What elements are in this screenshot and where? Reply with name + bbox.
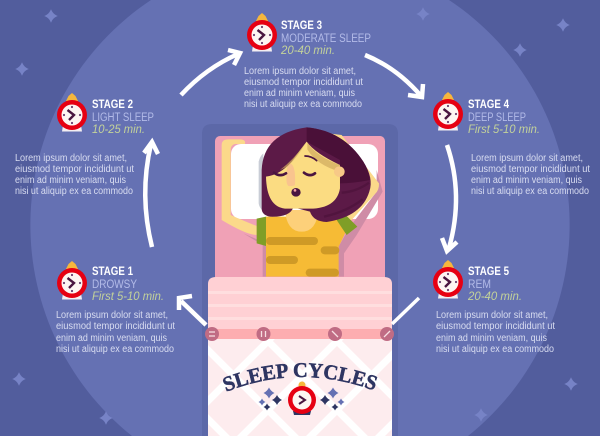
stage 5 text: nisi ut aliquip ex ea commodo bbox=[436, 344, 554, 355]
stage 2 heading: 10-25 min. bbox=[92, 124, 145, 136]
stage 5 bbox=[433, 260, 555, 355]
stage 4 bbox=[433, 92, 590, 197]
stage 4 text bbox=[471, 153, 590, 197]
icon: alarm clock bbox=[433, 260, 463, 298]
stage 5 heading bbox=[467, 266, 522, 303]
hair bbox=[262, 127, 371, 222]
stage 2 bbox=[15, 93, 154, 197]
stage 2 text bbox=[15, 153, 134, 197]
pillow bbox=[231, 144, 378, 219]
arrow: stage 2 to stage 3 bbox=[181, 50, 240, 95]
stage 4 text: eiusmod tempor incididunt ut bbox=[471, 164, 590, 175]
stage 3 text: nisi ut aliquip ex ea commodo bbox=[244, 99, 362, 110]
stage 2 text: eiusmod tempor incididunt ut bbox=[15, 164, 134, 175]
stage 3 heading: 20-40 min. bbox=[280, 45, 335, 57]
blanket band bbox=[208, 329, 392, 339]
line: blanket to stage 5 bbox=[392, 298, 419, 324]
arrow: stage 4 to stage 5 bbox=[442, 145, 457, 251]
stage 1 text: nisi ut aliquip ex ea commodo bbox=[56, 344, 174, 355]
eyes and mouth bbox=[274, 173, 286, 175]
stage 3 heading: MODERATE SLEEP bbox=[281, 33, 371, 45]
shirt bbox=[266, 217, 347, 277]
stage 5 text: enim ad minim veniam, quis bbox=[436, 333, 547, 344]
icon: alarm clock bbox=[247, 13, 277, 52]
stage 3 heading: STAGE 3 bbox=[281, 20, 322, 32]
stage 5 text: eiusmod tempor incididunt ut bbox=[436, 321, 555, 332]
icon: alarm clock bbox=[57, 261, 87, 300]
mattress bbox=[215, 136, 385, 286]
stage 1 text: eiusmod tempor incididunt ut bbox=[56, 321, 175, 332]
stage 5 heading: REM bbox=[468, 279, 491, 291]
arrow: stage 3 to stage 4 bbox=[365, 55, 423, 97]
panel: bed bbox=[202, 124, 398, 436]
stage 4 text: enim ad minim veniam, quis bbox=[471, 175, 582, 186]
stage 4 heading: STAGE 4 bbox=[468, 99, 510, 111]
stage 3 text: Lorem ipsum dolor sit amet, bbox=[244, 66, 356, 77]
stage 4 text: nisi ut aliquip ex ea commodo bbox=[471, 186, 589, 197]
stage 3 text: eiusmod tempor incididunt ut bbox=[244, 77, 363, 88]
arrow: blanket to stage 1 bbox=[179, 296, 206, 325]
stage 2 text: Lorem ipsum dolor sit amet, bbox=[15, 153, 127, 164]
stage 4 heading bbox=[468, 99, 540, 136]
stage 1 heading: STAGE 1 bbox=[92, 266, 134, 278]
stage 1 text bbox=[56, 310, 175, 355]
stage 5 text bbox=[436, 310, 555, 355]
icon: alarm clock bbox=[433, 92, 463, 130]
stage 2 heading: LIGHT SLEEP bbox=[92, 112, 154, 124]
stage 2 heading: STAGE 2 bbox=[92, 99, 133, 111]
shirt stripes bbox=[266, 237, 339, 277]
character: sleeping woman bbox=[222, 127, 383, 277]
stage 1 text: Lorem ipsum dolor sit amet, bbox=[56, 310, 168, 321]
stage 1 heading: First 5-10 min. bbox=[92, 291, 164, 303]
arrow: stage 1 to stage 2 bbox=[144, 142, 158, 247]
stage 3 text: enim ad minim veniam, quis bbox=[244, 88, 355, 99]
bed frame bbox=[202, 124, 398, 436]
title sparkles bbox=[258, 388, 344, 410]
body shadow bbox=[243, 170, 383, 277]
stage 2 heading bbox=[92, 99, 154, 136]
raised arms bbox=[222, 139, 257, 235]
stage 1 bbox=[56, 261, 175, 355]
stage 2 text: nisi ut aliquip ex ea commodo bbox=[15, 186, 133, 197]
stage 5 heading: 20-40 min. bbox=[467, 291, 522, 303]
stage 4 text: Lorem ipsum dolor sit amet, bbox=[471, 153, 583, 164]
stage 1 heading: DROWSY bbox=[92, 279, 137, 291]
icon: alarm clock bbox=[57, 93, 87, 132]
blanket buttons bbox=[205, 327, 394, 341]
face bbox=[266, 142, 340, 209]
stage 5 heading: STAGE 5 bbox=[468, 266, 510, 278]
stage 1 text: enim ad minim veniam, quis bbox=[56, 333, 167, 344]
blanket top stripes bbox=[208, 277, 392, 340]
stage 4 heading: First 5-10 min. bbox=[468, 124, 540, 136]
stage 2 text: enim ad minim veniam, quis bbox=[15, 175, 126, 186]
title clock bbox=[288, 382, 316, 415]
title: SLEEP CYCLES bbox=[222, 362, 378, 392]
neck bbox=[285, 210, 318, 232]
stage 3 text bbox=[244, 66, 363, 110]
stage 3 bbox=[244, 13, 371, 110]
stage 1 heading bbox=[92, 266, 164, 303]
stage 5 text: Lorem ipsum dolor sit amet, bbox=[436, 310, 548, 321]
sleeves bbox=[257, 213, 357, 246]
stage 3 heading bbox=[280, 20, 371, 57]
blanket bbox=[208, 277, 392, 436]
blanket lattice bbox=[208, 339, 392, 436]
stage 4 heading: DEEP SLEEP bbox=[468, 112, 526, 124]
